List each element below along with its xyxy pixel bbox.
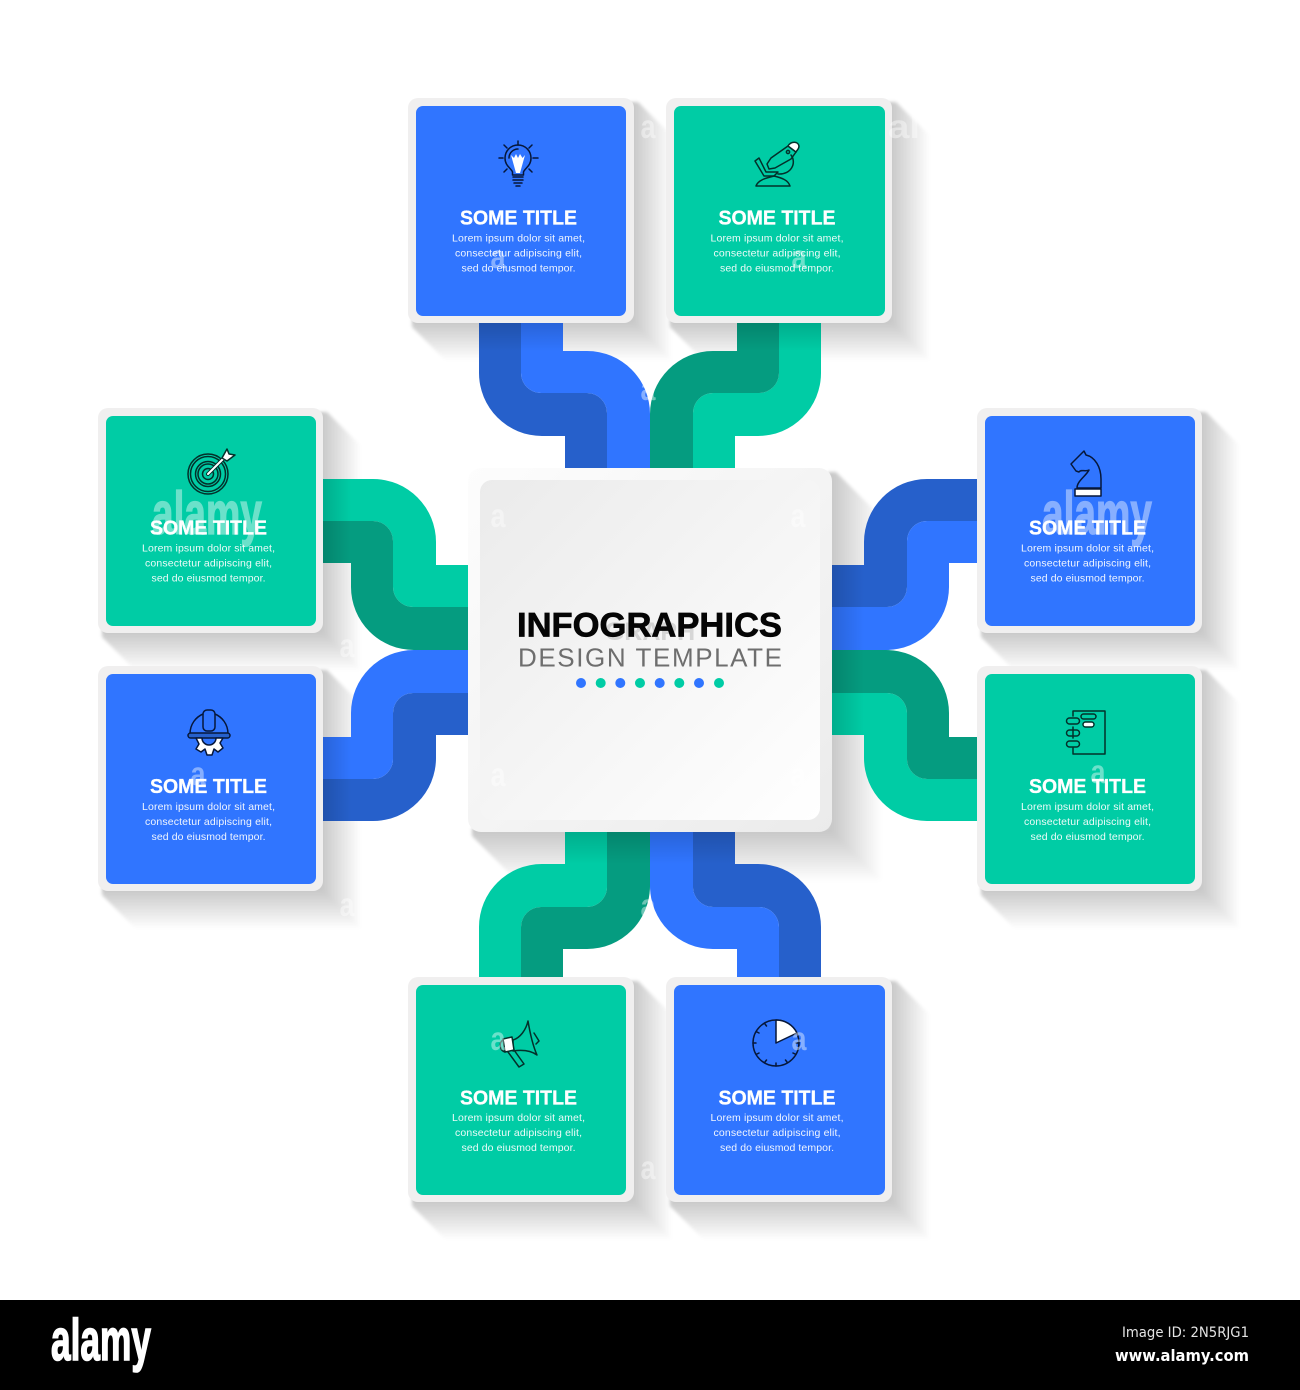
text block: sed do eiusmod tempor. bbox=[720, 262, 834, 274]
text block bbox=[1021, 542, 1154, 584]
watermark marks: a bbox=[490, 238, 506, 275]
connector shading near cards bbox=[323, 323, 864, 864]
panel: bottom-right card bbox=[666, 977, 892, 1202]
text block: consectetur adipiscing elit, bbox=[145, 816, 272, 828]
panel: top-right card bbox=[666, 98, 892, 323]
connector: right-bottom green bbox=[832, 650, 977, 821]
watermark marks: a bbox=[792, 1020, 807, 1057]
text block: consectetur adipiscing elit, bbox=[145, 558, 272, 570]
subtitle: DESIGN TEMPLATE bbox=[518, 642, 782, 672]
heading: SOME TITLE bbox=[460, 208, 577, 230]
connector: left-bottom blue bbox=[323, 650, 468, 821]
footer bar bbox=[0, 1300, 1300, 1390]
watermark marks: a bbox=[340, 886, 355, 923]
panel: left-bottom card bbox=[98, 666, 323, 891]
heading: SOME TITLE bbox=[718, 1088, 836, 1110]
panel: right-bottom card bbox=[977, 666, 1202, 891]
connector: top-right green bbox=[650, 323, 821, 468]
text block: sed do eiusmod tempor. bbox=[462, 1142, 576, 1154]
panel: bottom-left card bbox=[408, 977, 634, 1202]
icon: light bulb bbox=[499, 141, 538, 186]
text block: sed do eiusmod tempor. bbox=[462, 262, 576, 274]
watermark marks: a bbox=[640, 887, 656, 924]
watermark marks: a bbox=[340, 627, 355, 664]
text block: Lorem ipsum dolor sit amet, bbox=[1021, 801, 1154, 813]
watermark marks: a bbox=[640, 1149, 656, 1186]
watermark marks: a bbox=[790, 756, 806, 793]
connector: bottom-right blue bbox=[650, 832, 821, 977]
text block: Lorem ipsum dolor sit amet, bbox=[142, 542, 275, 554]
watermark: centre: GRAPH bbox=[605, 618, 695, 646]
panel: right-top card bbox=[977, 408, 1202, 633]
text block: Lorem ipsum dolor sit amet, bbox=[710, 232, 844, 244]
connector: bottom-left green bbox=[479, 832, 650, 977]
watermark marks bbox=[190, 108, 1106, 1186]
connector: top-left blue bbox=[479, 323, 650, 468]
heading: SOME TITLE bbox=[150, 518, 267, 540]
connector: left-top green bbox=[323, 479, 468, 650]
text block: sed do eiusmod tempor. bbox=[1030, 831, 1144, 843]
icon: target with dart bbox=[188, 449, 235, 494]
text block: consectetur adipiscing elit, bbox=[455, 248, 582, 260]
text block bbox=[452, 1112, 585, 1154]
text block bbox=[710, 1112, 844, 1154]
text block: consectetur adipiscing elit, bbox=[714, 1127, 840, 1139]
panel: left-top card bbox=[98, 408, 323, 633]
icon: clock bbox=[753, 1020, 799, 1066]
text block: consectetur adipiscing elit, bbox=[455, 1127, 582, 1139]
watermark marks: a bbox=[1090, 753, 1106, 790]
text block bbox=[452, 232, 585, 274]
watermark marks: a bbox=[792, 238, 807, 275]
panel: centre card bbox=[468, 468, 832, 832]
text block: sed do eiusmod tempor. bbox=[720, 1142, 834, 1154]
heading: SOME TITLE bbox=[1029, 776, 1146, 798]
text block: consectetur adipiscing elit, bbox=[1024, 558, 1151, 570]
text block: Lorem ipsum dolor sit amet, bbox=[452, 232, 585, 244]
watermark marks: a bbox=[190, 755, 206, 792]
footer logo: alamy bbox=[51, 1308, 151, 1373]
icon: helmet and gear bbox=[188, 710, 230, 755]
watermark marks: a bbox=[490, 497, 506, 534]
heading: SOME TITLE bbox=[150, 776, 267, 798]
connector: right-top blue bbox=[832, 479, 977, 650]
text block: sed do eiusmod tempor. bbox=[152, 572, 266, 584]
text block: Lorem ipsum dolor sit amet, bbox=[1021, 542, 1154, 554]
text block: sed do eiusmod tempor. bbox=[152, 831, 266, 843]
icon: microscope bbox=[755, 142, 799, 186]
heading: SOME TITLE bbox=[1029, 518, 1146, 540]
text block: Lorem ipsum dolor sit amet, bbox=[710, 1112, 844, 1124]
watermark marks: a bbox=[640, 370, 656, 407]
footer image id: Image ID: 2N5RJG1 bbox=[1122, 1325, 1249, 1341]
long shadows behind cards bbox=[102, 102, 1240, 1240]
text block bbox=[1021, 801, 1154, 843]
icon: notebook bbox=[1066, 711, 1105, 754]
dots row bbox=[576, 678, 724, 688]
watermark: alamy left: alamy bbox=[152, 480, 262, 547]
text block: Lorem ipsum dolor sit amet, bbox=[452, 1112, 585, 1124]
watermark marks: a bbox=[490, 756, 506, 793]
text block: consectetur adipiscing elit, bbox=[714, 248, 840, 260]
panel: top-left card bbox=[408, 98, 634, 323]
text block: Lorem ipsum dolor sit amet, bbox=[142, 801, 275, 813]
text block bbox=[142, 801, 275, 843]
icon: megaphone bbox=[500, 1021, 539, 1067]
text block bbox=[710, 232, 844, 274]
watermark marks: a bbox=[790, 497, 806, 534]
icon: chess knight bbox=[1071, 451, 1101, 496]
watermark: alamy right: alamy bbox=[1042, 480, 1152, 547]
text block: consectetur adipiscing elit, bbox=[1024, 816, 1151, 828]
watermark marks: a bbox=[490, 1020, 506, 1057]
text block: sed do eiusmod tempor. bbox=[1030, 572, 1144, 584]
text block bbox=[142, 542, 275, 584]
watermark marks: al bbox=[888, 108, 920, 145]
heading: SOME TITLE bbox=[718, 208, 836, 230]
title: INFOGRAPHICS bbox=[517, 606, 782, 644]
footer url: www.alamy.com bbox=[1115, 1346, 1249, 1365]
watermark marks: a bbox=[640, 108, 656, 145]
heading: SOME TITLE bbox=[460, 1088, 577, 1110]
